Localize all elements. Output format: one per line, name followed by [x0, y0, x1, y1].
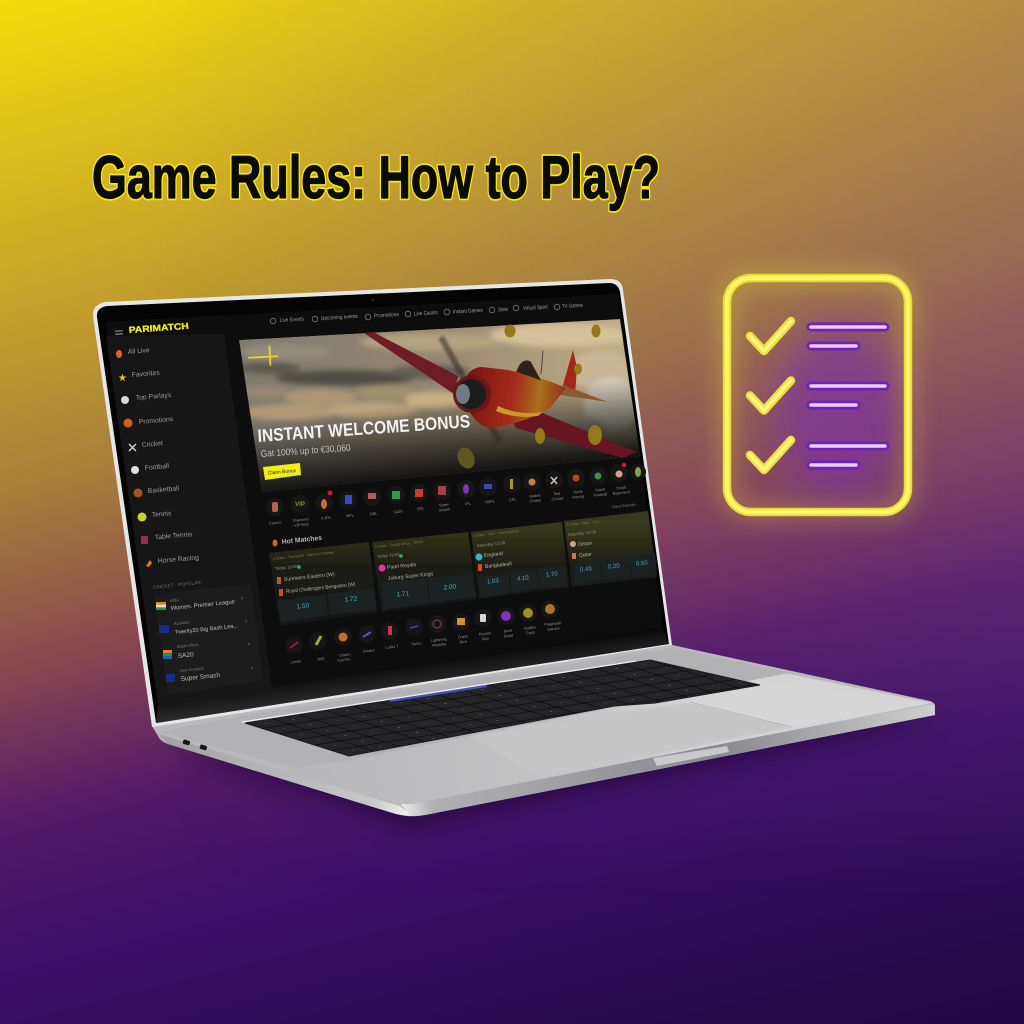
logo [115, 321, 189, 337]
match card 3 [471, 522, 569, 599]
keyboard [242, 660, 760, 756]
laptop lid [93, 279, 672, 727]
nav links: TV Games [562, 303, 583, 310]
sport category icons row [266, 463, 646, 528]
match card 3: Bangladesh [485, 561, 513, 570]
sidebar menu: Basketball [148, 485, 180, 495]
sidebar menu: Horse Racing [158, 554, 199, 565]
usb ports [182, 739, 207, 751]
match card 3: 1.03 [487, 578, 500, 586]
laptop base [152, 645, 935, 816]
casino game icons row: Aviator [363, 648, 376, 654]
sport category icons row: Global [529, 493, 541, 499]
match card 4: Cricket · Asia · Cup [567, 520, 600, 527]
match card 2: Cricket · South Africa · SA20 [375, 540, 423, 549]
league row: New Zealand: New Zealand [180, 666, 204, 673]
laptop [93, 279, 940, 828]
match card 4: Oman [578, 541, 592, 548]
league row: India: › [241, 596, 243, 602]
sport category icons row: Cricket [551, 496, 564, 502]
nav links: Live Events [280, 317, 304, 324]
match card 2: Paarl Royals [387, 562, 417, 571]
casino game icons row: JetX [317, 657, 325, 661]
sport category icons row: SBPL [485, 500, 495, 505]
match card 4: Saturday 12:00 [568, 529, 597, 537]
sidebar menu: All Live [128, 347, 150, 356]
league row: South Africa: SA20 [177, 651, 194, 660]
nav links: Promotions [374, 312, 399, 319]
check and lines 3 [750, 440, 885, 470]
banner headline: INSTANT WELCOME BONUS [257, 411, 471, 446]
sport category icons row: IL20s [321, 516, 331, 520]
league row: India: Women. Premier League [171, 599, 235, 612]
nav links [270, 303, 583, 324]
sidebar menu: Favorites [132, 370, 161, 379]
check and lines 1 [750, 321, 885, 351]
clouds [239, 323, 640, 446]
sport category icons row: VIP Bets [294, 522, 309, 528]
match card 2 [372, 532, 477, 612]
casino game icons row: Dice [459, 640, 467, 644]
casino game icons row: Citizen [339, 652, 351, 658]
casino game icons row: Lightning [431, 637, 447, 643]
casino game icons row: Dead [504, 634, 513, 638]
sidebar menu [116, 347, 199, 567]
nav links: Instant Games [453, 308, 483, 315]
sport category icons row: Racing [572, 494, 585, 500]
screen [105, 294, 663, 704]
casino game icons row: Games [547, 626, 560, 632]
match card 1 [269, 542, 377, 626]
casino game icons row: Crash [458, 634, 468, 640]
match card 2: Joburg Super Kings [388, 571, 434, 582]
banner subheading: Gat 100% up to €30,060 [260, 443, 351, 460]
match card 4: Qatar [579, 552, 592, 559]
league row: New Zealand: Super Smash [180, 672, 221, 683]
match card 3: 4.10 [517, 575, 530, 583]
league row: Australia: Twenty20 Big Bash Lea... [175, 623, 239, 636]
nav links: Live Casino [414, 310, 438, 317]
sport category icons row: Super [439, 502, 449, 508]
sport category icons row: Small [595, 488, 605, 492]
match card 1: Royal Challengers Bengaluru (W) [286, 582, 356, 595]
casino game icons row [285, 600, 562, 665]
league row: Australia [159, 619, 247, 636]
match card 4: 0.20 [608, 563, 621, 571]
logo: PARIMATCH [128, 321, 189, 335]
sport category icons row: Stock [573, 490, 583, 494]
nav links: Virtual Sport [523, 304, 548, 312]
league row: New Zealand: › [251, 666, 253, 672]
sport category icons row: Casino [269, 520, 281, 526]
sport category icons row: Diamond [293, 517, 309, 523]
match card 1: 1.50 [296, 602, 310, 611]
sidebar [106, 334, 272, 704]
match card 3: 1.70 [546, 571, 559, 579]
casino game icons row: Turbo [411, 642, 421, 647]
claim bonus button [263, 463, 301, 480]
sidebar menu: Table Tennis [155, 531, 193, 541]
league row: New Zealand [166, 666, 253, 683]
sport category icons row: WPL [346, 514, 354, 518]
sport category icons row: Cricket [529, 498, 542, 504]
sport category icons row: VIP [295, 502, 305, 508]
match card 1: Today 19:00 [275, 564, 298, 571]
sidebar menu: Promotions [139, 416, 174, 426]
popular cricket leagues: CRICKET · POPULAR [153, 580, 202, 591]
sidebar menu: Top Parlays [136, 392, 172, 402]
league row: South Africa: South Africa [177, 642, 199, 649]
match card 3: England [484, 551, 503, 559]
league row: India [156, 596, 243, 612]
nav links: Slots [498, 307, 508, 313]
match card 2: 2.00 [443, 583, 457, 592]
sidebar menu: Cricket [142, 440, 163, 449]
sport category icons row: CPL [509, 498, 517, 502]
claim bonus button: Claim Bonus [268, 468, 297, 476]
casino game icons row: Rocket [479, 631, 491, 637]
hot matches heading: Hot Matches [281, 535, 323, 546]
match card 4 [564, 511, 657, 587]
trackpad [470, 702, 793, 778]
sidebar menu: Football [145, 463, 170, 472]
sport category icons row: BPL [417, 507, 425, 511]
sidebar menu: Tennis [152, 510, 172, 519]
league row: South Africa: › [248, 642, 250, 648]
icon: neon checklist [727, 278, 908, 512]
hero banner [239, 319, 640, 492]
match card 1: Sunrisers Eastern (W) [284, 572, 335, 583]
sidebar menu: ★ [118, 373, 127, 384]
popular cricket leagues [153, 580, 263, 695]
top navigation bar [105, 294, 621, 340]
sport category icons row: Basement [613, 490, 631, 496]
front notch [653, 746, 729, 766]
match card 2: 1.71 [396, 590, 410, 599]
title: Game Rules: How to Play? [92, 144, 660, 211]
yellow plus logo [247, 345, 278, 367]
match card 3: Cricket · Test · International [473, 529, 519, 538]
sport category icons row: Smash [438, 507, 451, 513]
match card 1: 1.72 [344, 595, 358, 604]
sport category icons row: Small [616, 486, 626, 490]
casino game icons row: Cash [526, 631, 535, 635]
casino game icons row: Golden [524, 625, 536, 631]
match card 3: Saturday 12:00 [477, 540, 506, 548]
sport category icons row: IPL [465, 502, 471, 506]
check and lines 2 [750, 380, 885, 410]
league row: Australia: › [245, 619, 247, 625]
sport category icons row: View Events › [612, 502, 638, 509]
sport category icons row: Football [593, 492, 607, 498]
casino game icons row: Dice [481, 637, 489, 641]
shadow under laptop [170, 690, 940, 828]
casino game icons row: Sun/Yin... [337, 657, 354, 663]
casino game icons row: Book [503, 629, 512, 633]
league row: Australia: Australia [174, 619, 190, 626]
league row: South Africa [163, 642, 250, 660]
match card 1: Cricket · Twenty20 · Women Premier [273, 550, 336, 561]
sport category icons row: Test [553, 492, 561, 496]
plane [364, 332, 637, 458]
match card 4: 0.43 [580, 566, 593, 574]
casino game icons row: Roulette [432, 642, 447, 648]
casino game icons row: Pragmatic [544, 621, 562, 627]
league row: India: India [170, 597, 180, 603]
match card 2: Today 19:00 [377, 552, 400, 559]
casino game icons row: Lucky 7 [385, 644, 399, 650]
sport category icons row: SA20 [393, 510, 403, 514]
match card 4: 0.50 [636, 560, 649, 568]
coins [454, 324, 602, 471]
title: Game Rules: How to Play? [92, 144, 660, 211]
casino game icons row: Limbo [291, 659, 301, 665]
nav links: Upcoming events [321, 314, 358, 322]
sport category icons row: BBL [370, 512, 378, 516]
